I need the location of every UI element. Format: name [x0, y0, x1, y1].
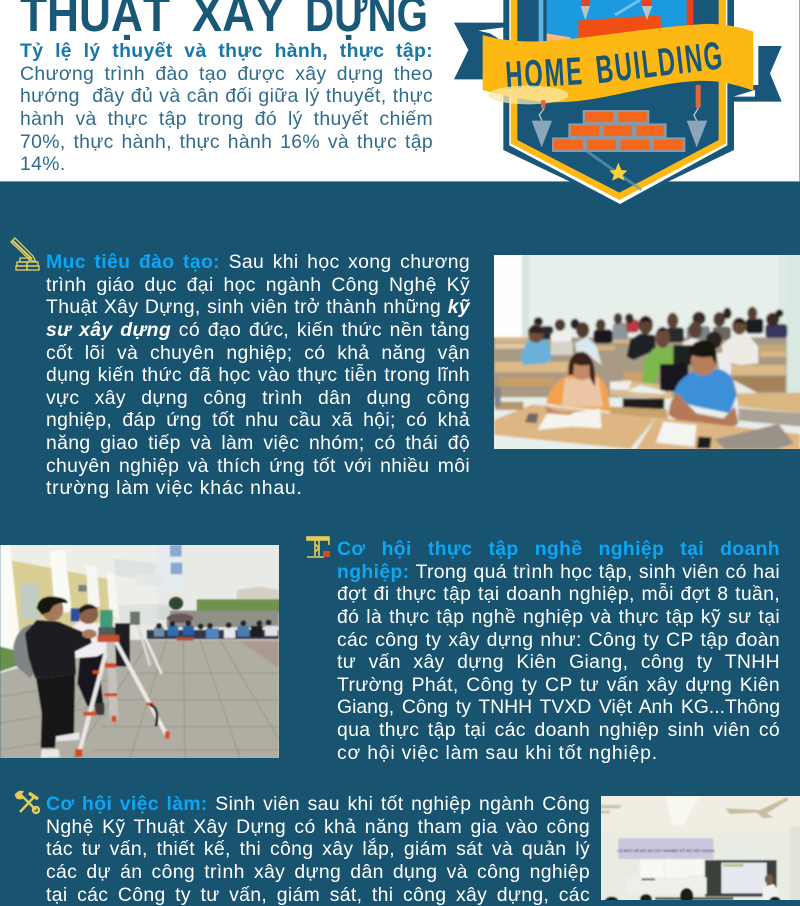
girl in orange [546, 352, 610, 412]
yellow banner: BUILDING [594, 33, 724, 92]
text block: internship opportunities [337, 538, 780, 764]
text block: internship opportunities: Giang, Công ty TNHH TVXD Việt Anh KG...Thông [337, 696, 780, 718]
text block: theory and practice ratio: Tỷ lệ lý thuyết và thực hành, thực tập: [20, 40, 433, 62]
icon: crossed tools [14, 790, 40, 814]
text block: internship opportunities: cơ hội việc làm sau khi tốt nghiệp. [337, 742, 658, 764]
student with backpack [13, 596, 97, 758]
photo: students in classroom [494, 255, 800, 449]
text block: internship opportunities: nghiệp: Trong quá trình học tập, sinh viên có hai [337, 561, 780, 583]
white header background [0, 0, 800, 181]
text block: theory and practice ratio: hành và thực tập trong đó lý thuyết chiếm [20, 108, 433, 130]
text block: training objective: năng giao tiếp và làm việc nhóm; có thái độ [46, 432, 470, 454]
text block: training objective: chuyên nghiệp và thích ứng tốt với nhiều môi [46, 455, 470, 477]
photo: surveying practice outdoors [0, 545, 279, 758]
text block: training objective: cốt lõi và chuyên nghiệp; có khả năng vận [46, 342, 470, 364]
text block: theory and practice ratio: 14%. [20, 153, 66, 175]
worker apron [578, 0, 662, 42]
text block: career opportunities: tại các Công ty tư vấn, giám sát, thi công xây dựng, các [46, 884, 590, 906]
text block: training objective: nghiệp, đáp ứng tốt nhu cầu xã hội; có khả [46, 409, 470, 431]
title [20, 0, 428, 40]
trowels [532, 85, 707, 147]
tripod with instrument [75, 610, 170, 757]
front desks [494, 404, 655, 449]
text block: career opportunities: Nghệ Kỹ Thuật Xây Dựng có khả năng tham gia vào công [46, 816, 590, 838]
photo: thesis defence room [601, 796, 800, 900]
second tripod [115, 612, 162, 674]
text block: training objective: Mục tiêu đào tạo: Sau khi học xong chương [46, 251, 470, 273]
bricks [552, 110, 685, 152]
icon: pencil and bricks [10, 237, 40, 271]
text block: theory and practice ratio: 70%, thực hành, thực hành 16% và thực tập [20, 131, 433, 153]
text block: training objective: vực xây dựng công trình dân dụng công [46, 387, 470, 409]
back row students [534, 307, 787, 343]
watermark [488, 86, 568, 104]
text block: career opportunities: Cơ hội việc làm: Sinh viên sau khi tốt nghiệp ngành Công [46, 793, 590, 815]
pavement [0, 640, 279, 760]
text block: training objective [46, 251, 470, 499]
yellow banner: HOME [504, 49, 583, 97]
text block: internship opportunities: Cơ hội thực tập nghề nghiệp tại doanh [337, 538, 780, 560]
star [583, 149, 642, 190]
text block: career opportunities: tác tư vấn, thiết kế, thi công xây lắp, giám sát và quản lý [46, 838, 590, 860]
text block: internship opportunities: Trường Phát, Công ty CP tư vấn xây dựng Kiên [337, 674, 780, 696]
logo: home building badge [454, 0, 782, 205]
text block: internship opportunities: tư vấn xây dựng Kiên Giang, công ty TNHH [337, 651, 780, 673]
older man [66, 604, 110, 715]
shield [503, 0, 734, 205]
middle row students [520, 316, 758, 385]
text block: training objective: sư xây dựng có đạo đức, kiến thức nền tảng [46, 319, 470, 341]
text block: training objective: trường làm việc khác nhau. [46, 477, 303, 499]
text block: internship opportunities: đợt đi thực tập tại doanh nghiệp, mỗi đợt 8 tuần, [337, 583, 780, 605]
text block: theory and practice ratio [20, 40, 433, 175]
icon: crane [306, 536, 330, 558]
text block: internship opportunities: các công ty xây dựng như: Công ty CP tập đoàn [337, 629, 780, 651]
text block: training objective: dụng kiến thức đã học vào thực tiễn trong lĩnh [46, 364, 470, 386]
seated group [147, 620, 279, 641]
text block: career opportunities: các dự án công trình xây dựng dân dụng và công nghiệp [46, 861, 590, 883]
photo: thesis defence room: LỄ BẢO VỆ ĐỒ ÁN TỐT NGHIỆP KỸ SƯ XÂY DỰNG [617, 848, 715, 853]
yellow banner [483, 24, 753, 102]
text block: training objective: trình giáo dục đại học ngành Công Nghệ Kỹ [46, 274, 470, 296]
text block: training objective: Thuật Xây Dựng, sinh viên trở thành những kỹ [46, 296, 470, 318]
ribbon tails [454, 23, 782, 102]
mid desks [610, 380, 673, 399]
text block: internship opportunities: qua thực tập tại các doanh nghiệp sinh viên có [337, 719, 780, 741]
man in blue [668, 340, 738, 428]
text block: theory and practice ratio: hướng đầy đủ và cân đối giữa lý thuyết, thực [20, 85, 433, 107]
text block: career opportunities [46, 793, 590, 906]
text block: theory and practice ratio: Chương trình đào tạo được xây dựng theo [20, 63, 433, 85]
text block: internship opportunities: đó là thực tập nghề nghiệp và thực tập kỹ sư tại [337, 606, 780, 628]
